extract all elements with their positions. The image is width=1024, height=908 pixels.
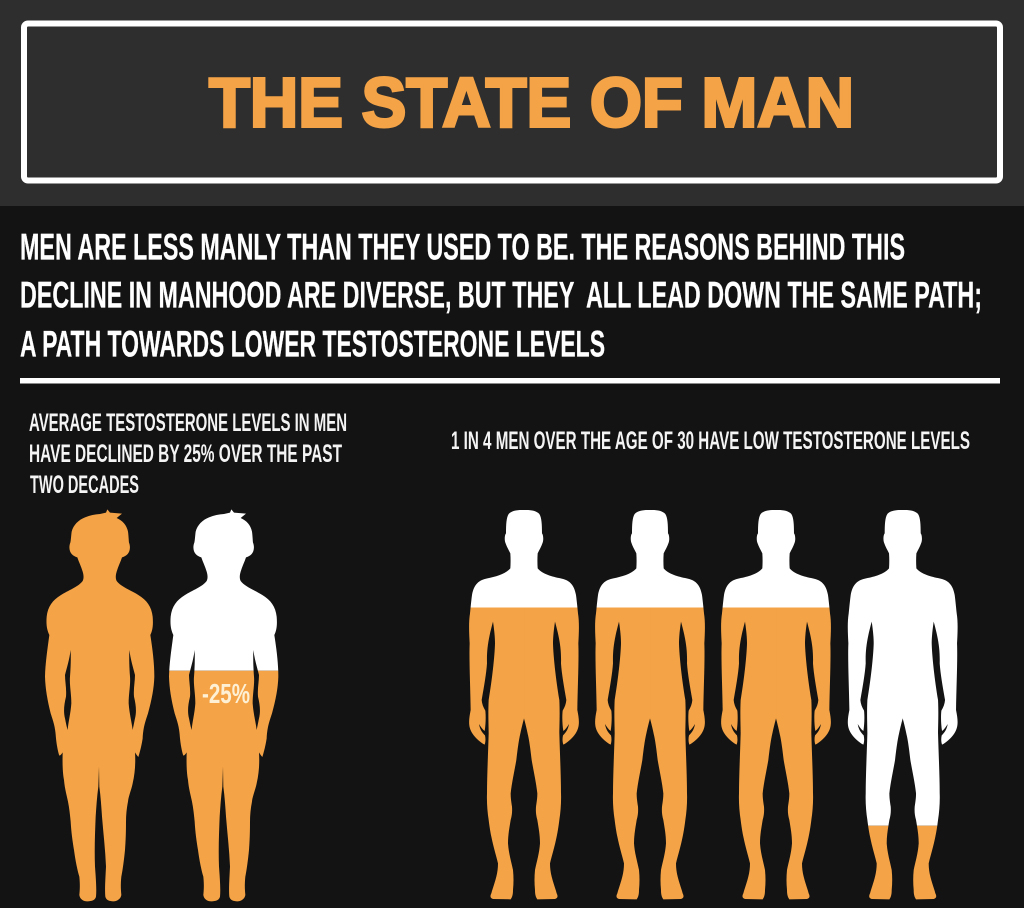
title: THE STATE OF MAN xyxy=(209,64,854,142)
left caption: 25% decline: TWO DECADES xyxy=(30,471,139,499)
minus 25 percent label: -25% xyxy=(202,678,250,709)
figure: man with testosterone down 25% xyxy=(169,509,278,901)
figure: man 4, low testosterone xyxy=(848,510,958,899)
left caption: 25% decline: HAVE DECLINED BY 25% OVER THE PAST xyxy=(29,440,342,468)
left caption: 25% decline xyxy=(29,409,347,499)
title box xyxy=(24,24,1000,180)
figure: man 2, normal level xyxy=(595,510,705,899)
intro paragraph xyxy=(20,226,982,365)
figure: full orange man, past level xyxy=(45,509,154,901)
left caption: 25% decline: AVERAGE TESTOSTERONE LEVELS IN MEN xyxy=(29,409,347,437)
figure: man 1, normal level xyxy=(469,510,579,899)
intro paragraph: A PATH TOWARDS LOWER TESTOSTERONE LEVELS xyxy=(20,324,605,365)
figure: man 3, normal level xyxy=(721,510,831,899)
header band xyxy=(0,0,1024,206)
